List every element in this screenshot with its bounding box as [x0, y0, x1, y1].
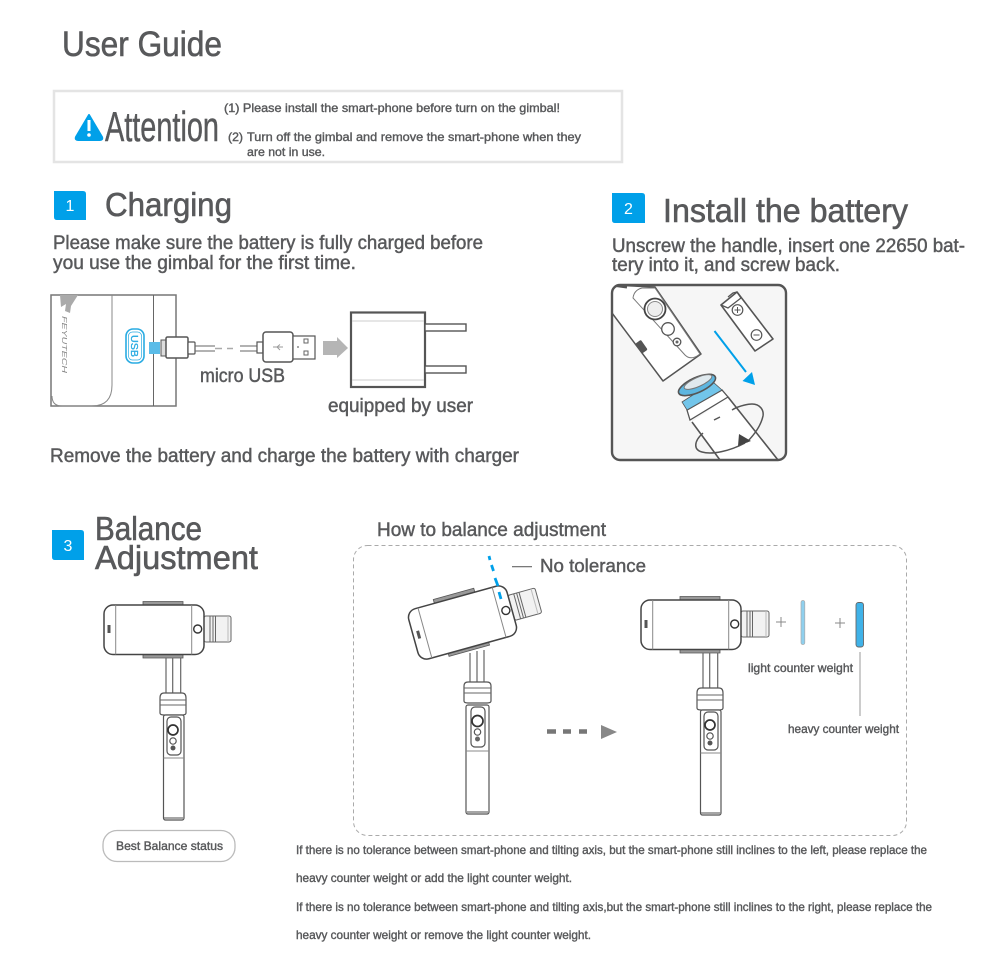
tolerance indicator: [489, 555, 646, 599]
charging illustration: [51, 295, 474, 417]
gimbal head part: [612, 285, 701, 381]
tolerance indicator: No tolerance: [540, 555, 646, 576]
battery charger: FEYUTECH: [60, 316, 69, 374]
balance notes: If there is no tolerance between smart-phone and tilting axis, but the smart-phone still inclines to the left, please replace the: [296, 843, 927, 857]
gimbal: best balance: [104, 602, 231, 820]
attention text: (1) Please install the smart-phone before turn on the gimbal!: [224, 101, 560, 115]
rotation arrow: [696, 404, 763, 453]
heavy counter weight: heavy counter weight: [788, 722, 900, 736]
power adapter: [351, 312, 466, 387]
charging instructions: you use the gimbal for the first time.: [53, 253, 356, 274]
section 2 badge: [612, 193, 645, 223]
attention heading: Attention: [105, 103, 219, 150]
section 3 badge: [52, 530, 84, 560]
balance notes: heavy counter weight or remove the light counter weight.: [296, 928, 591, 942]
gimbal: balanced with weights: [641, 596, 769, 815]
battery instructions: tery into it, and screw back.: [612, 255, 840, 276]
best balance label: Best Balance status: [116, 839, 223, 853]
battery instructions: Unscrew the handle, insert one 22650 bat-: [612, 236, 965, 257]
section 2 badge: 2: [624, 201, 633, 218]
attention text: are not in use.: [247, 145, 325, 159]
balance notes: [296, 843, 932, 942]
section 3 badge: 3: [64, 538, 73, 555]
battery charger: [51, 295, 176, 406]
heading: how to balance: How to balance adjustment: [377, 520, 607, 541]
micro USB cable: [161, 332, 315, 362]
heavy counter weight: [788, 602, 900, 736]
arrow: insert direction: [714, 331, 755, 385]
icon: warning triangle: [76, 115, 102, 140]
charging note: Remove the battery and charge the battery with charger: [50, 446, 520, 467]
battery illustration: [612, 285, 786, 460]
gimbal: tilted: [405, 572, 546, 814]
light counter weight: [748, 600, 854, 675]
light counter weight: light counter weight: [748, 661, 854, 675]
heading: balance adjustment: [95, 510, 258, 576]
balance notes: If there is no tolerance between smart-phone and tilting axis,but the smart-phone still inclines to the right, please replace the: [296, 900, 932, 914]
heading: install the battery: Install the battery: [663, 192, 908, 229]
heading: balance adjustment: Adjustment: [95, 539, 258, 576]
charging instructions: [53, 233, 483, 274]
label: equipped by user: equipped by user: [328, 396, 474, 417]
section 1 badge: [54, 191, 86, 220]
arrow: [323, 337, 348, 358]
label: micro USB: micro USB: [200, 366, 285, 387]
panel: attention: [54, 91, 622, 162]
section 1 badge: 1: [66, 198, 75, 215]
panel: dashed balance box: [354, 546, 906, 836]
heading: charging: Charging: [105, 186, 232, 223]
battery: [721, 292, 773, 351]
best balance label: [103, 830, 235, 862]
attention text: [224, 101, 581, 159]
battery charger: USB: [128, 335, 139, 357]
battery instructions: [612, 236, 965, 276]
title: User Guide: [62, 25, 222, 64]
charging instructions: Please make sure the battery is fully charged before: [53, 233, 483, 254]
attention text: Turn off the gimbal and remove the smart-phone when they: [247, 130, 581, 144]
attention text: (2): [228, 130, 243, 144]
handle: [676, 370, 778, 460]
heading: balance adjustment: Balance: [95, 510, 202, 547]
arrow: dashed: [547, 725, 617, 739]
balance notes: heavy counter weight or add the light counter weight.: [296, 871, 572, 885]
